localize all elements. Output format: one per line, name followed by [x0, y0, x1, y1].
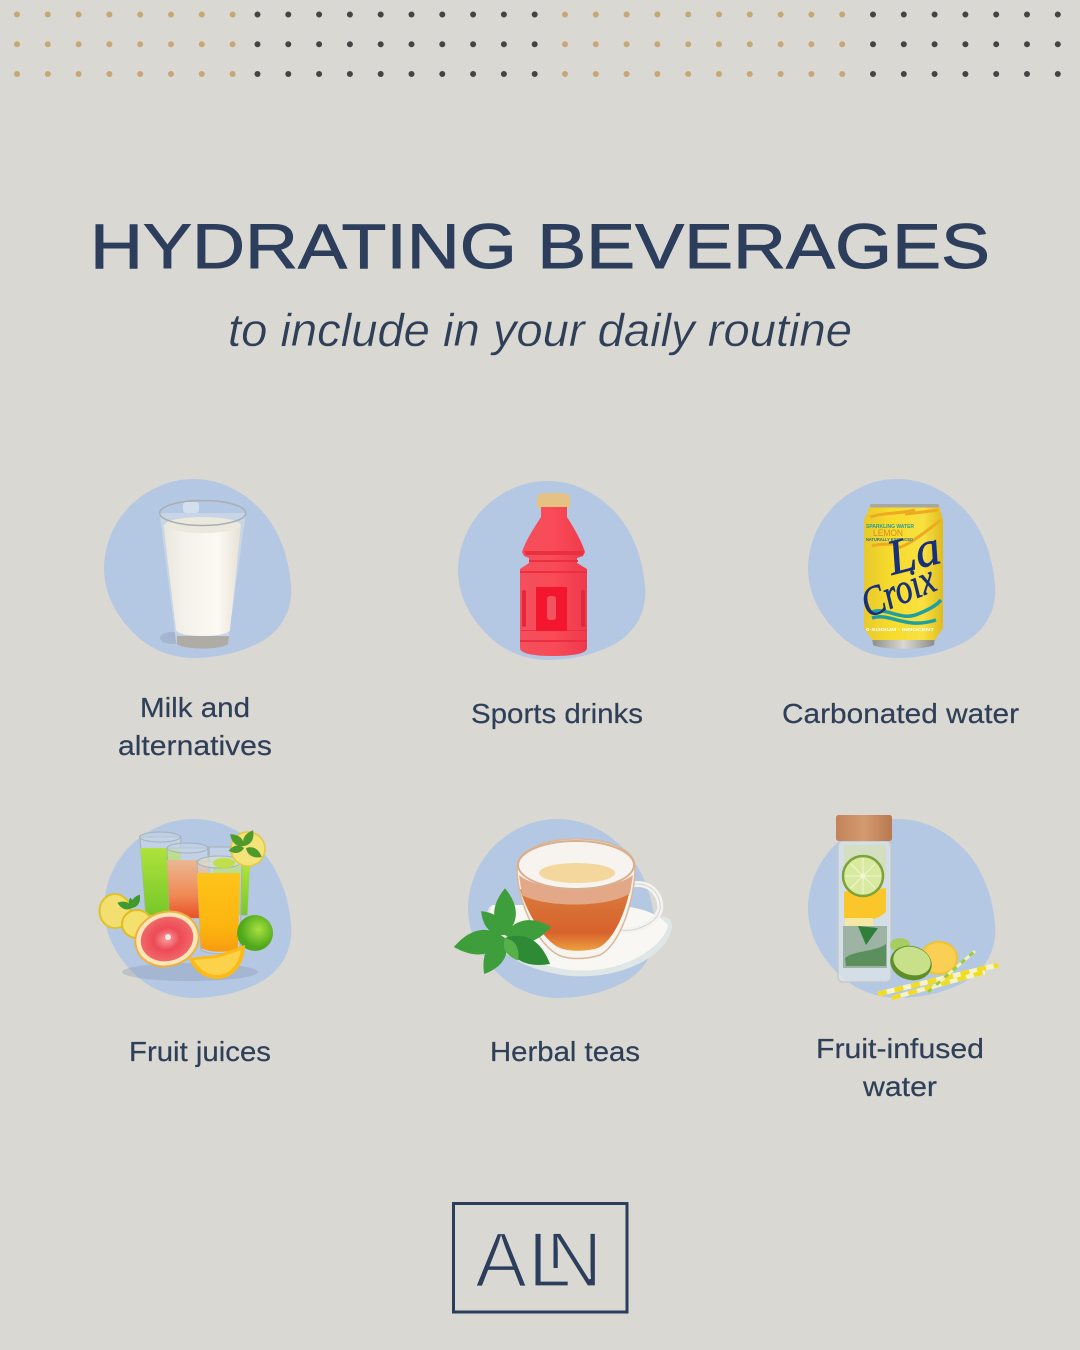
logo: ALN	[454, 1204, 627, 1312]
blob: fruit-infused water background	[808, 819, 995, 998]
label: sports drinks: Sports drinks	[471, 698, 643, 729]
icon: La Croix can: LEMON	[873, 528, 903, 538]
panel: carbonated water	[782, 479, 1019, 729]
logo: ALN: N	[546, 1216, 602, 1304]
label: milk and alternatives: alternatives	[118, 730, 272, 761]
panel: milk and alternatives	[104, 479, 291, 761]
icon: red sports bottle	[520, 493, 587, 656]
dot pattern header	[17, 14, 1062, 74]
label: fruit-infused water: Fruit-infused	[816, 1033, 984, 1064]
label: fruit juices: Fruit juices	[129, 1036, 271, 1067]
icon: La Croix can: Croix	[855, 556, 942, 627]
panel: herbal teas	[452, 819, 672, 1067]
label: milk and alternatives: Milk and	[140, 692, 250, 723]
panel: sports drinks	[458, 481, 645, 729]
icon: infuser bottle with citrus and straws	[836, 815, 998, 998]
icon: La Croix can: SPARKLING WATER	[866, 524, 914, 530]
blob: milk background	[104, 479, 291, 658]
title: HYDRATING BEVERAGES	[90, 212, 990, 282]
icon: glass of milk	[160, 500, 246, 648]
icon: La Croix can: La	[880, 519, 946, 586]
label: fruit-infused water	[816, 1033, 984, 1102]
subtitle: to include in your daily routine	[228, 304, 852, 356]
logo: ALN: L	[528, 1216, 571, 1304]
blob: fruit juices background	[104, 819, 291, 998]
label: carbonated water: Carbonated water	[782, 698, 1019, 729]
panel: fruit juices	[100, 819, 291, 1067]
icon: La Croix can: 0-SODIUM · INNOCENT	[866, 627, 934, 632]
label: milk and alternatives	[118, 692, 272, 761]
logo: ALN: A	[475, 1216, 527, 1304]
label: fruit-infused water: water	[862, 1071, 937, 1102]
icon: La Croix can	[855, 504, 946, 649]
blob: carbonated water background	[808, 479, 995, 658]
blob: sports drink background	[458, 481, 645, 660]
blob: herbal teas background	[468, 819, 655, 998]
icon: La Croix can: NATURALLY ESSENCED	[866, 537, 914, 542]
icon: juice glasses and citrus	[100, 828, 273, 981]
icon: cup of tea with mint	[452, 839, 672, 979]
label: herbal teas: Herbal teas	[490, 1036, 640, 1067]
panel: fruit-infused water	[808, 815, 998, 1102]
